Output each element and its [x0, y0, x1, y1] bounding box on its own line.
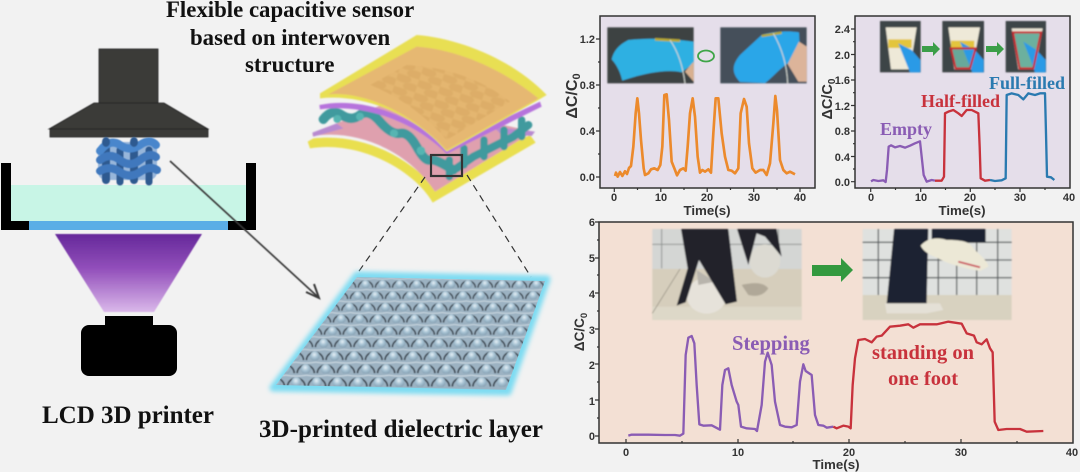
y tick labels: 0.4	[835, 152, 851, 164]
axes ticks	[596, 39, 800, 192]
label: Half-filled: Half-filled	[921, 91, 1000, 111]
x tick labels: 0	[868, 192, 874, 204]
y tick labels: 0.0	[835, 177, 850, 189]
half-filled curve	[935, 110, 990, 181]
resin vat	[1, 163, 256, 230]
x tick labels	[623, 447, 1078, 459]
heading: sensor title: structure	[245, 52, 334, 77]
y tick labels: 0.8	[835, 126, 850, 138]
x tick labels: 30	[955, 447, 967, 459]
x tick labels: 20	[964, 192, 976, 204]
y tick labels: 0.0	[580, 172, 595, 184]
y tick labels	[835, 24, 851, 189]
top orange layer	[328, 47, 538, 150]
chart: stepping and standing	[572, 217, 1078, 472]
x tick labels: 40	[1066, 447, 1078, 459]
dashed lines to detail	[357, 175, 531, 277]
y tick labels: 5	[589, 253, 595, 265]
y tick labels: 2.4	[835, 24, 851, 36]
x tick labels: 30	[748, 192, 760, 204]
y tick labels: 2.0	[835, 50, 850, 62]
y tick labels: 6	[589, 217, 595, 229]
x tick labels: 10	[915, 192, 927, 204]
x tick labels: 0	[623, 447, 629, 459]
y tick labels: 1.2	[580, 34, 595, 46]
light source	[81, 316, 177, 376]
resin liquid	[10, 185, 246, 221]
y tick labels: 1.6	[835, 75, 850, 87]
axis titles: Time(s)	[938, 203, 986, 218]
x tick labels	[868, 192, 1075, 204]
y tick labels: 3	[589, 325, 595, 337]
plot frame	[855, 16, 1070, 188]
axis titles	[820, 78, 986, 218]
plot frame	[599, 222, 1073, 443]
axis titles: ΔC/C	[564, 80, 581, 119]
x tick labels: 0	[611, 192, 617, 204]
y tick labels: 0.4	[580, 126, 596, 138]
UV light beam	[55, 234, 202, 312]
arrow: printer to dielectric layer	[170, 161, 319, 298]
chart: cup filling	[820, 16, 1075, 218]
y tick labels: 4	[589, 289, 596, 301]
axis titles: ΔC/C	[820, 84, 836, 119]
axes ticks	[595, 222, 1017, 443]
y tick labels: 2	[589, 360, 595, 372]
y tick labels	[589, 217, 596, 443]
y tick labels: 1	[589, 396, 595, 408]
lower purple strip	[312, 123, 343, 137]
sensor illustration	[308, 35, 547, 203]
axis titles: 0	[579, 313, 590, 318]
cyan glow	[273, 275, 547, 392]
empty curve	[871, 141, 935, 182]
photo: one foot	[863, 229, 1012, 320]
x tick labels: 20	[701, 192, 713, 204]
y tick labels: 0	[589, 431, 595, 443]
top yellow electrode	[320, 35, 547, 152]
printer head	[49, 49, 208, 137]
heading: sensor title: based on interwoven	[190, 25, 390, 50]
x tick labels: 10	[655, 192, 667, 204]
3D-printed dielectric layer	[245, 275, 554, 443]
photo: stepping feet	[652, 229, 802, 320]
x tick labels: 20	[843, 447, 855, 459]
axis titles	[572, 313, 860, 472]
axis titles	[564, 73, 731, 218]
icon: cycle ring	[698, 50, 714, 62]
axis titles: 0	[827, 78, 838, 84]
arrow: green transition	[812, 258, 853, 282]
label: Stepping: Stepping	[732, 333, 811, 355]
chart: wrist bending	[564, 16, 815, 218]
plot frame	[600, 16, 815, 188]
inspection box	[431, 155, 462, 176]
label: standing on one foot: one foot	[888, 368, 958, 390]
axis titles: Time(s)	[683, 203, 731, 218]
axis titles: ΔC/C	[572, 318, 587, 351]
photos: bending glove	[607, 27, 807, 83]
arrows: progression	[922, 42, 1004, 56]
orange response curve	[615, 94, 795, 177]
label: Empty: Empty	[880, 119, 932, 139]
y tick labels: 1.2	[835, 101, 850, 113]
x tick labels: 40	[1063, 192, 1075, 204]
label: LCD 3D printer: LCD 3D printer	[42, 402, 214, 429]
standing curve	[833, 322, 1043, 432]
interwoven bumps	[370, 65, 510, 140]
bottom yellow electrode	[308, 135, 536, 203]
axis titles: 0	[571, 73, 583, 80]
label: standing on one foot: standing on	[872, 342, 975, 364]
interwoven teal chain	[323, 112, 528, 177]
x tick labels: 10	[732, 447, 744, 459]
upper purple strip	[319, 102, 542, 154]
pink layer	[313, 100, 533, 192]
lattice surface	[276, 277, 545, 390]
panel: LCD 3D printer	[1, 49, 256, 429]
photos: cups	[880, 21, 1046, 72]
label: Full-filled: Full-filled	[989, 73, 1065, 93]
vat window	[29, 221, 228, 230]
label: dielectric layer: 3D-printed dielectric layer	[259, 416, 543, 443]
y tick labels: 0.8	[580, 80, 595, 92]
x tick labels: 40	[794, 192, 806, 204]
printed lattice	[98, 137, 157, 182]
x tick labels	[611, 192, 806, 204]
axis titles: Time(s)	[812, 457, 860, 472]
x tick labels: 30	[1014, 192, 1026, 204]
y tick labels	[580, 34, 596, 184]
full-filled curve	[990, 93, 1054, 181]
stepping curve	[628, 336, 833, 436]
heading: sensor title	[166, 0, 414, 77]
axes ticks	[851, 29, 1045, 192]
